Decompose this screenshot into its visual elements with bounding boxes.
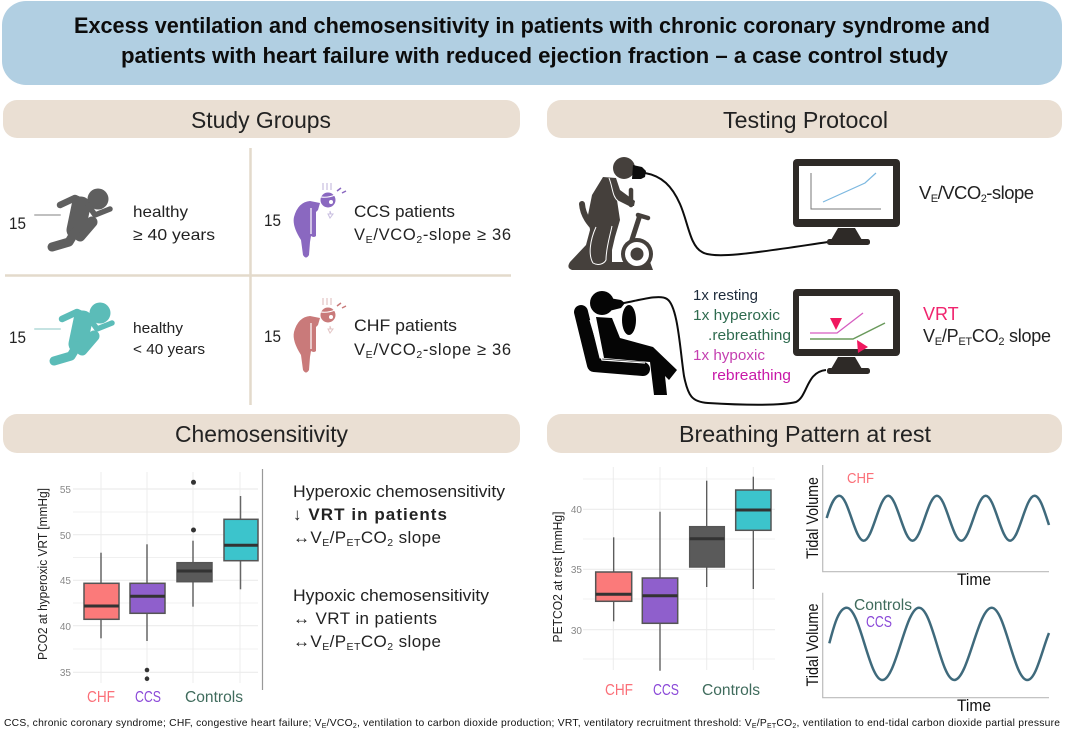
text: chemosensitivity findings: CO (361, 632, 387, 651)
boxplot: PETCO2 at rest (551, 467, 775, 699)
icon: red bent person (294, 298, 346, 372)
label: VE/PETCO2 slope: E (935, 336, 942, 348)
text: chemosensitivity findings: 2 (387, 641, 393, 653)
group: CHF patients: E (366, 349, 373, 361)
text: chemosensitivity findings: E (322, 537, 329, 549)
group: healthy at least 40 years (9, 188, 215, 247)
text: chemosensitivity findings: ↓ VRT in patients (293, 505, 447, 524)
text: chemosensitivity findings: slope (393, 528, 441, 547)
line chart: CHF tidal volume: Tidal Volume (803, 477, 822, 559)
boxplot: PETCO2 at rest: 40 (571, 505, 582, 516)
footnote abbreviations: E (752, 723, 757, 730)
footnote abbreviations: /VCO (327, 718, 353, 729)
footnote abbreviations: , ventilation to end-tidal carbon dioxide partial pressure (796, 718, 1060, 729)
boxplot: PCO2 at hyperoxic VRT (36, 469, 262, 706)
protocol list: 1x resting (693, 287, 758, 304)
group: CHF patients: -slope ≥ 36 (423, 341, 511, 359)
footnote abbreviations: , ventilation to carbon dioxide production; VRT, ventilatory recruitment threshold: V (357, 718, 752, 729)
icon: teal runner (35, 302, 112, 361)
label: VE/VCO2 slope: 2 (981, 193, 987, 205)
group: CCS patients: -slope ≥ 36 (423, 226, 511, 244)
icon: lower monitor (793, 289, 900, 374)
text: chemosensitivity findings: slope (393, 632, 441, 651)
line chart: CHF tidal volume: Time (957, 570, 991, 589)
boxplot: PCO2 at hyperoxic VRT: CCS (135, 689, 161, 706)
line chart: controls and CCS tidal volume: Controls (854, 597, 912, 614)
line chart: controls and CCS tidal volume: Tidal Volume (803, 604, 822, 686)
boxplot: PCO2 at hyperoxic VRT: 50 (60, 531, 71, 542)
panel: breathing pattern at rest (551, 465, 1049, 715)
text: chemosensitivity findings: ET (347, 641, 361, 653)
group: CCS patients: CCS patients (354, 203, 455, 221)
text: chemosensitivity findings: E (322, 641, 329, 653)
group: CCS patients (264, 183, 511, 258)
line chart: controls and CCS tidal volume (803, 593, 1049, 715)
text: chemosensitivity findings: 2 (387, 537, 393, 549)
label: VE/PETCO2 slope: 2 (998, 336, 1005, 348)
text: chemosensitivity findings: ↔V (293, 528, 322, 547)
group: healthy at least 40 years: healthy (133, 204, 188, 221)
label: VE/VCO2 slope: E (931, 193, 938, 205)
line chart: controls and CCS tidal volume: Time (957, 696, 991, 715)
heading: breathing pattern at rest: Breathing Pattern at rest (679, 421, 932, 447)
heading: study groups (3, 100, 520, 138)
group: CCS patients: 15 (264, 211, 281, 230)
footnote abbreviations: E (322, 723, 327, 730)
group: healthy under 40 years: healthy (133, 320, 184, 337)
protocol list: rebreathing (712, 367, 791, 384)
group: CHF patients (264, 298, 511, 372)
group: healthy under 40 years: < 40 years (133, 341, 205, 358)
heading: testing protocol: Testing Protocol (723, 107, 888, 133)
group: CHF patients: V (354, 341, 365, 359)
boxplot: PCO2 at hyperoxic VRT: Controls (185, 689, 243, 706)
label: VRT: VRT (923, 304, 959, 324)
panel: study groups (9, 183, 511, 372)
group: healthy under 40 years: 15 (9, 328, 26, 347)
boxplot: PETCO2 at rest: 35 (571, 565, 582, 576)
line chart: CHF tidal volume: CHF (847, 470, 874, 487)
tube to lower monitor (624, 297, 826, 405)
group: CHF patients: /VCO (373, 341, 416, 359)
text: chemosensitivity findings: ET (347, 537, 361, 549)
icon: grey runner (35, 188, 110, 247)
boxplot: PCO2 at hyperoxic VRT: PCO2 at hyperoxic VRT [mmHg] (36, 488, 50, 660)
protocol list: 1x hyperoxic (693, 307, 781, 324)
heading: breathing pattern at rest (547, 414, 1062, 453)
label: VE/VCO2 slope: -slope (986, 182, 1034, 203)
footnote abbreviations: 2 (792, 723, 796, 730)
heading: study groups: Study Groups (191, 107, 331, 133)
protocol list: .rebreathing (708, 327, 791, 344)
text: chemosensitivity findings: ↔ VRT in patients (293, 609, 437, 628)
title banner: Excess ventilation and chemosensitivity in patients with chronic coronary syndrome and (74, 13, 990, 38)
heading: chemosensitivity: Chemosensitivity (175, 421, 348, 447)
title banner (2, 1, 1062, 85)
heading: testing protocol (547, 100, 1062, 138)
boxplot: PETCO2 at rest: 30 (571, 626, 582, 637)
boxplot: PETCO2 at rest: Controls (702, 682, 760, 699)
footnote abbreviations: /P (757, 718, 767, 729)
tube to upper monitor (645, 173, 828, 255)
icon: seated person (581, 291, 677, 395)
label: VE/PETCO2 slope: slope (1004, 326, 1051, 346)
text: chemosensitivity findings: CO (361, 528, 387, 547)
label: VE/PETCO2 slope: ET (958, 336, 972, 348)
label: VE/VCO2 slope: V (919, 182, 931, 203)
boxplot: PCO2 at hyperoxic VRT: 35 (60, 668, 71, 679)
boxplot: PCO2 at hyperoxic VRT: CHF (87, 689, 115, 706)
footnote abbreviations: ET (767, 723, 777, 730)
boxplot: PETCO2 at rest: PETCO2 at rest [mmHg] (551, 512, 565, 642)
boxplot: PCO2 at hyperoxic VRT: 40 (60, 622, 71, 633)
group: healthy at least 40 years: 15 (9, 214, 26, 233)
label: VE/VCO2 slope: /VCO (938, 182, 981, 203)
protocol list (693, 287, 791, 384)
footnote abbreviations: CCS, chronic coronary syndrome; CHF, congestive heart failure; V (4, 718, 322, 729)
title banner: patients with heart failure with reduced ejection fraction – a case control study (121, 43, 949, 68)
line chart: controls and CCS tidal volume: CCS (866, 614, 892, 631)
text: chemosensitivity findings: Hypoxic chemosensitivity (293, 586, 490, 605)
label: VE/PETCO2 slope: CO (972, 326, 999, 346)
text: chemosensitivity findings: Hyperoxic chemosensitivity (293, 482, 506, 501)
boxplot: PETCO2 at rest: CHF (605, 682, 633, 699)
boxplot: PETCO2 at rest: CCS (653, 682, 679, 699)
group: CHF patients: 15 (264, 327, 281, 346)
footnote abbreviations: 2 (353, 723, 357, 730)
group: CHF patients: CHF patients (354, 317, 457, 335)
boxplot: PCO2 at hyperoxic VRT: 55 (60, 485, 71, 496)
panel: chemosensitivity (36, 469, 506, 706)
protocol list: 1x hypoxic (693, 347, 766, 364)
text: chemosensitivity findings: /P (330, 528, 346, 547)
boxplot: PCO2 at hyperoxic VRT: 45 (60, 576, 71, 587)
group: CCS patients: E (366, 234, 373, 246)
heading: chemosensitivity (3, 414, 520, 453)
icon: upper monitor (793, 159, 900, 245)
icon: person on exercise bike (568, 157, 653, 270)
group: CCS patients: 2 (416, 234, 422, 246)
text: chemosensitivity findings: ↔V (293, 632, 322, 651)
icon: purple bent person (294, 183, 346, 258)
group: CCS patients: V (354, 226, 365, 244)
text: chemosensitivity findings (293, 482, 506, 653)
group: healthy under 40 years (9, 302, 205, 361)
line chart: CHF tidal volume (803, 465, 1049, 589)
label: VE/PETCO2 slope: V (923, 326, 935, 346)
panel: testing protocol (568, 157, 1051, 405)
group: healthy at least 40 years: ≥ 40 years (133, 227, 215, 244)
group: CHF patients: 2 (416, 349, 422, 361)
group: CCS patients: /VCO (373, 226, 416, 244)
footnote abbreviations: CO (776, 718, 792, 729)
label: VE/PETCO2 slope: /P (942, 326, 959, 346)
text: chemosensitivity findings: /P (330, 632, 346, 651)
